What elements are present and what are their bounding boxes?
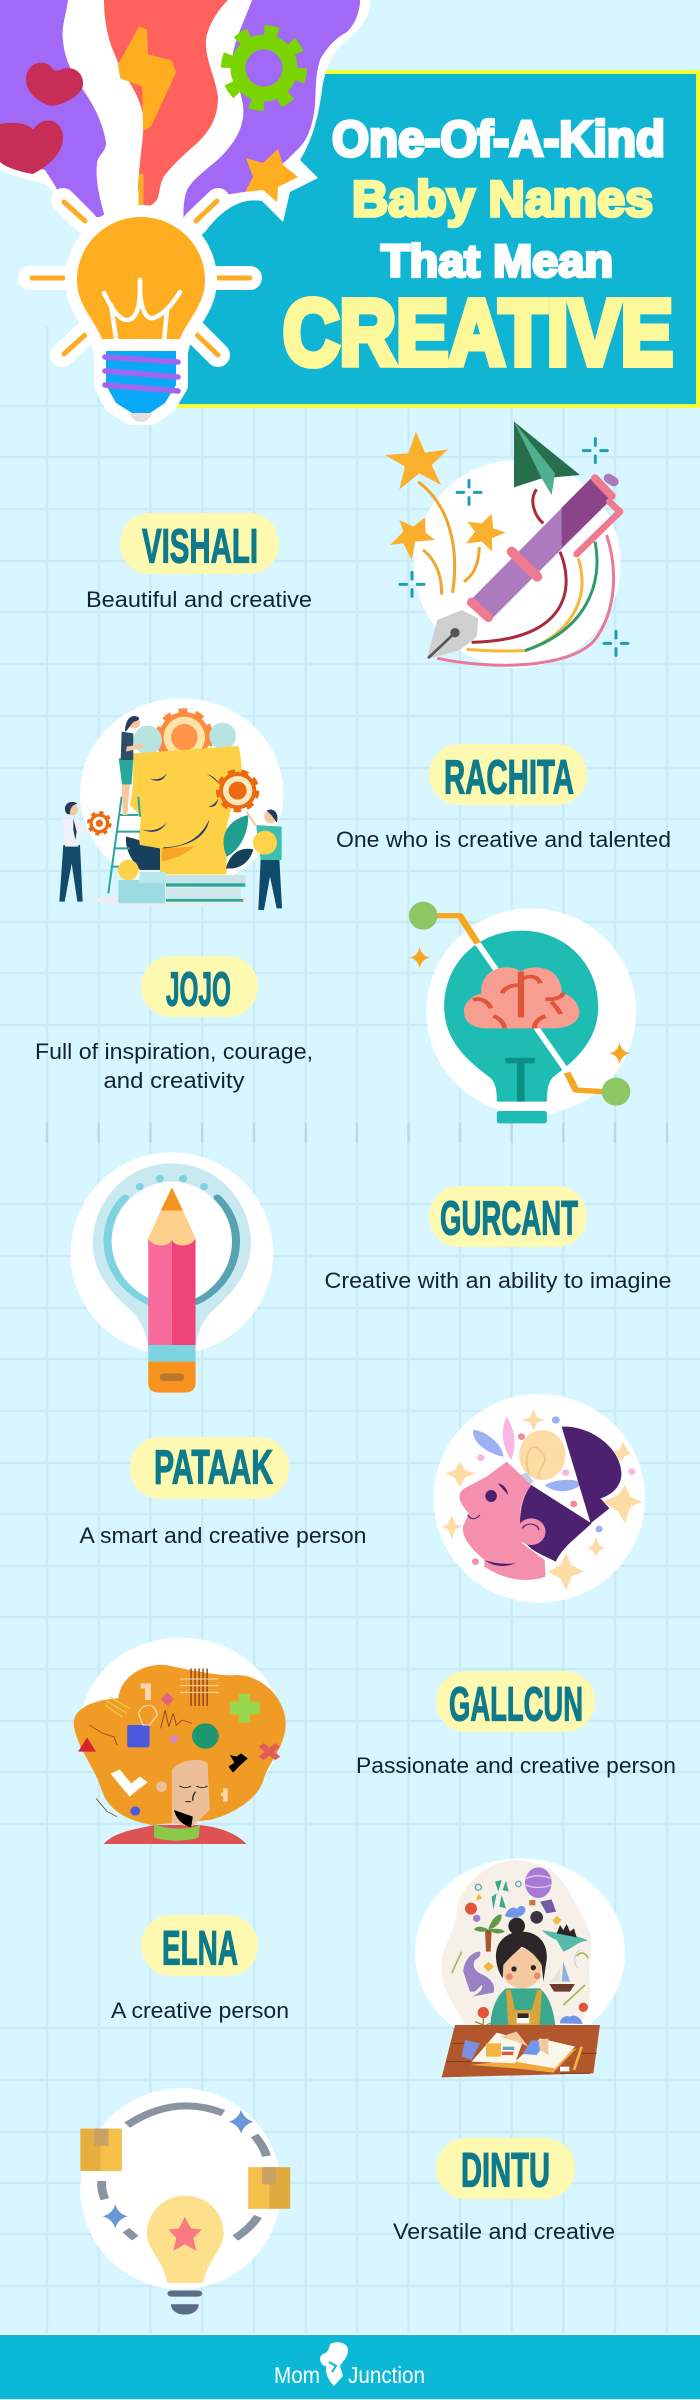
- name: JOJO: [166, 964, 231, 1016]
- title line: One-Of-A-Kind: One-Of-A-Kind: [332, 111, 665, 167]
- title line: That Mean: That Mean: [381, 236, 613, 286]
- name: GURCANT: [440, 1192, 578, 1246]
- entry: Dintu: [393, 2138, 615, 2244]
- logo: MomJunction: Junction: [348, 2362, 425, 2388]
- meaning: Passionate and creative person: [356, 1753, 676, 1778]
- title banner: [177, 70, 700, 408]
- name pill: [436, 2138, 575, 2199]
- icon: light rays: [30, 176, 250, 355]
- icon: bulb base: [106, 351, 176, 413]
- meaning: Beautiful and creative: [86, 587, 312, 612]
- illustration: fountain pen with stars: [385, 422, 628, 668]
- illustration: woman with orange hair full of shapes: [74, 1638, 286, 1844]
- illustration: open head with lightbulb: [433, 1394, 645, 1603]
- icon: filament: [104, 280, 180, 352]
- meaning: A smart and creative person: [80, 1523, 366, 1548]
- entry: Rachita: [336, 744, 671, 852]
- meaning: A creative person: [111, 1998, 289, 2023]
- title line: Baby Names: Baby Names: [352, 171, 653, 227]
- logo: MomJunction: Mom: [274, 2362, 320, 2388]
- name: DINTU: [461, 2144, 550, 2198]
- meaning: [35, 1039, 313, 1093]
- footer band: [0, 2333, 700, 2399]
- illustration: pencil in a lightbulb: [71, 1152, 273, 1393]
- illustration: brain in a lightbulb: [409, 902, 636, 1123]
- entry: Pataak: [80, 1437, 366, 1548]
- icon: bulb glass: [77, 217, 205, 352]
- icon: star: [245, 149, 298, 202]
- name: VISHALI: [142, 520, 258, 574]
- name: ELNA: [162, 1922, 238, 1976]
- meaning: Versatile and creative: [393, 2219, 615, 2244]
- icon: heart: [26, 63, 83, 106]
- illustration: people working on a creative head: [59, 698, 283, 910]
- entry: Jojo: [35, 956, 313, 1093]
- name: RACHITA: [444, 752, 574, 804]
- meaning: One who is creative and talented: [336, 827, 671, 852]
- meaning: and creativity: [104, 1068, 244, 1093]
- name: GALLCUN: [449, 1678, 583, 1732]
- name pill: [429, 744, 587, 805]
- entry: Gurcant: [324, 1186, 672, 1293]
- logo: MomJunction: [274, 2342, 425, 2388]
- icon: gear: [226, 30, 302, 106]
- name pill: [130, 1437, 289, 1499]
- icon: lightning: [120, 29, 174, 128]
- meaning: Full of inspiration, courage,: [35, 1039, 313, 1064]
- entry: Vishali: [86, 513, 312, 612]
- name: PATAAK: [154, 1442, 273, 1494]
- entry: Gallcun: [356, 1671, 676, 1778]
- name pill: [120, 513, 279, 574]
- name pill: [141, 956, 258, 1017]
- illustration: girl reading with imagination doodles: [415, 1858, 625, 2077]
- lightbulb with colourful ideas bursting out: [0, 0, 370, 422]
- icon: heart: [0, 121, 63, 174]
- meaning: Creative with an ability to imagine: [324, 1268, 672, 1293]
- entry: Elna: [111, 1915, 289, 2023]
- name pill: [436, 1671, 595, 1732]
- illustration: star lightbulb with boxes: [80, 2088, 290, 2315]
- name pill: [429, 1186, 587, 1247]
- name pill: [141, 1915, 258, 1976]
